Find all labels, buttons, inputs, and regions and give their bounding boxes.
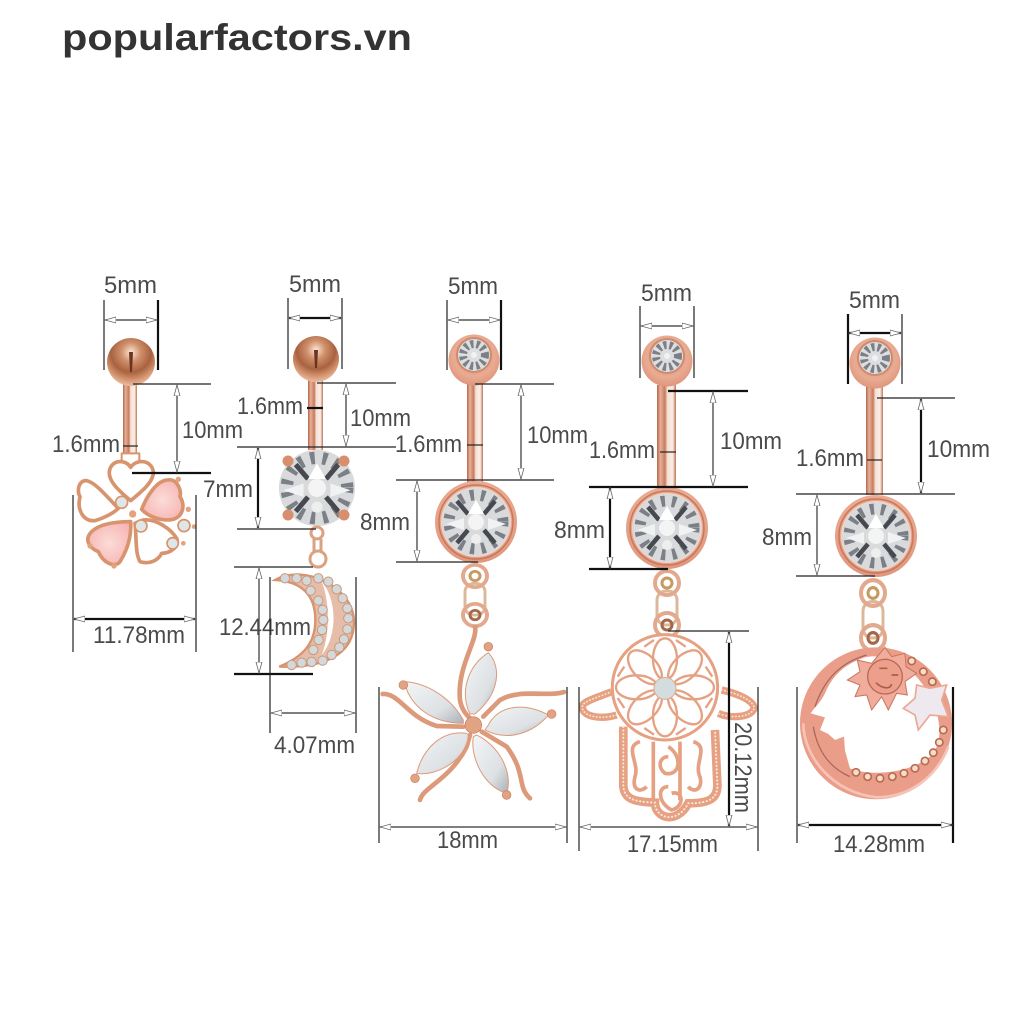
panel: hamsa belly ring	[554, 280, 782, 858]
bar	[123, 383, 137, 457]
dimension: 5mm	[288, 271, 342, 369]
dimension: 10mm	[396, 384, 588, 480]
dimension: 10mm	[237, 383, 411, 447]
top gem	[850, 338, 900, 388]
dimension: 1.6mm: 1.6mm	[237, 393, 303, 420]
icon: sun and moon charm	[800, 647, 952, 799]
dimension: 10mm: 10mm	[527, 422, 588, 449]
dimension: 1.6mm: 1.6mm	[52, 431, 120, 458]
dimension: 10mm: 10mm	[927, 436, 990, 463]
bar	[866, 385, 883, 495]
panel: moon charm belly ring	[203, 271, 411, 759]
dimension: 4.07mm	[270, 577, 356, 759]
main gem	[435, 481, 517, 563]
dimension: 12.44mm	[219, 567, 313, 674]
panel: flower charm belly ring	[52, 272, 243, 652]
dimension: 7mm	[203, 448, 316, 529]
main gem	[626, 487, 708, 569]
icon: hamsa charm	[582, 635, 754, 817]
icon: crescent moon	[275, 574, 354, 670]
panel: flower gem belly ring	[360, 273, 588, 854]
connector	[310, 527, 326, 567]
dimension: 1.6mm: 1.6mm	[589, 437, 655, 464]
dimension: 5mm: 5mm	[849, 287, 900, 314]
center stone	[654, 677, 676, 699]
dimension: 17.15mm: 17.15mm	[627, 831, 718, 858]
dimension: 10mm: 10mm	[720, 428, 782, 455]
dimension: 1.6mm: 1.6mm	[796, 445, 864, 472]
connector	[861, 580, 885, 651]
title: popularfactors.vn	[62, 17, 412, 58]
dimension: 5mm: 5mm	[289, 271, 341, 298]
ball	[293, 336, 339, 382]
panel: sun and moon belly ring	[762, 287, 990, 858]
dimension: 10mm: 10mm	[182, 417, 243, 444]
dimension: 10mm	[589, 391, 782, 487]
dimension: 10mm	[796, 398, 990, 494]
bar	[657, 385, 676, 489]
dimension: 5mm	[447, 273, 501, 370]
dimension: 4.07mm: 4.07mm	[274, 732, 355, 759]
dimension: 18mm: 18mm	[437, 827, 498, 854]
dimension: 1.6mm: 1.6mm	[395, 431, 462, 458]
dimension: 11.78mm	[73, 495, 196, 652]
dimension: 5mm: 5mm	[448, 273, 498, 300]
top gem	[448, 334, 500, 386]
dimension: 7mm: 7mm	[203, 476, 253, 503]
dimension: 8mm: 8mm	[360, 509, 410, 536]
icon: round gem with prongs	[279, 450, 355, 526]
dimension: 5mm: 5mm	[641, 280, 692, 307]
dimension: 20.12mm: 20.12mm	[729, 722, 756, 813]
dimension: 5mm	[104, 272, 158, 370]
bar	[467, 383, 483, 483]
dimension: 5mm	[640, 280, 694, 378]
dimension: 8mm	[554, 488, 668, 569]
bar	[308, 380, 323, 450]
icon: flower charm	[78, 453, 196, 569]
dimension: 8mm	[762, 495, 875, 576]
dimension: 8mm: 8mm	[554, 517, 605, 544]
dimension: 11.78mm: 11.78mm	[93, 622, 185, 649]
dimension: 12.44mm: 12.44mm	[219, 614, 311, 641]
connector	[655, 571, 679, 637]
icon: five petal flower	[383, 627, 564, 800]
dimension: 17.15mm	[579, 687, 758, 858]
top gem	[642, 336, 692, 386]
dimension: 10mm: 10mm	[350, 405, 411, 432]
dimension: 8mm	[360, 481, 478, 562]
dimension: 14.28mm: 14.28mm	[833, 831, 925, 858]
dimension: 18mm	[379, 687, 567, 854]
connector	[463, 565, 487, 626]
main gem	[835, 495, 917, 577]
ball	[107, 338, 155, 386]
dimension: 5mm: 5mm	[104, 272, 157, 299]
dimension: 10mm	[132, 384, 243, 473]
dimension: 8mm: 8mm	[762, 524, 812, 551]
dimension: 5mm	[848, 287, 902, 384]
